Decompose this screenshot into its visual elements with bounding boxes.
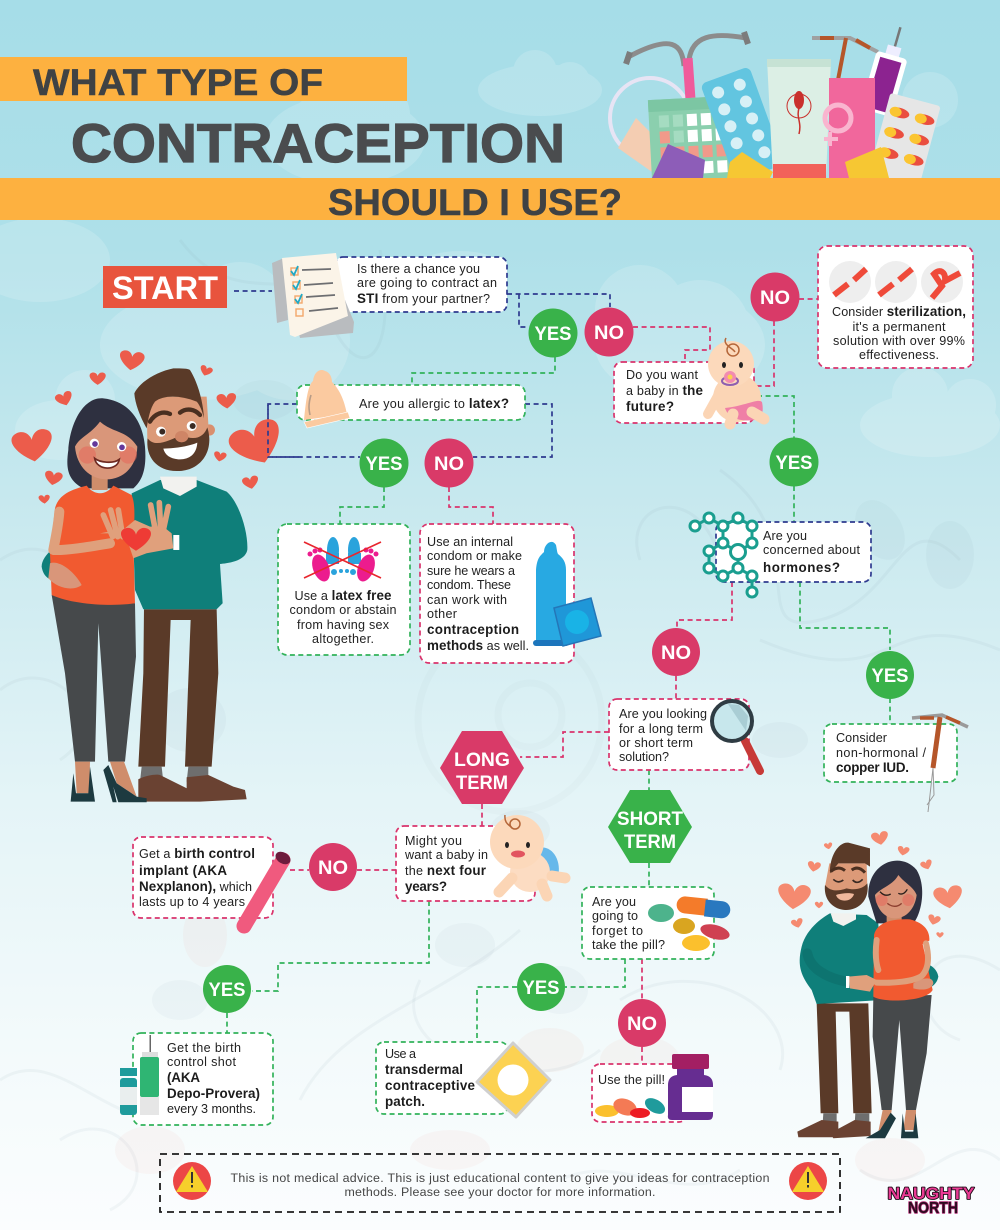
illustration: embracing couple: [777, 830, 964, 1138]
panel: next four years question: [396, 815, 565, 901]
text: implant advice: Get a birth control: [139, 846, 255, 861]
icon: warning left: [173, 1162, 211, 1200]
decision: no: NO: [661, 643, 691, 664]
text: internal condom advice: condom or make: [427, 549, 522, 563]
text: transdermal patch advice: Use a: [385, 1047, 416, 1061]
icon: blue condom and wrapper: [533, 542, 601, 646]
decision: yes: [866, 651, 914, 699]
man head: [134, 368, 215, 471]
text: disclaimer: methods. Please see your doctor for more information.: [344, 1185, 656, 1199]
text: latex free advice: [290, 588, 396, 646]
decision: no: [652, 628, 700, 676]
woman legs: [873, 995, 932, 1110]
icon: implant tube: [244, 849, 293, 926]
panel: use the pill advice: [592, 1054, 713, 1122]
text: pill forget question: going to: [592, 909, 638, 923]
panel: transdermal patch advice: [376, 1042, 550, 1117]
woman shirt: [50, 486, 135, 605]
man collar: [831, 913, 856, 926]
man behind arm: [42, 537, 70, 580]
man sweater: [132, 480, 247, 609]
title bar: should I use: SHOULD I USE?: [328, 182, 622, 223]
decision: no: NO: [318, 858, 348, 879]
panel: implant advice: [133, 837, 293, 926]
text: implant advice: lasts up to 4 years: [139, 895, 245, 909]
text: disclaimer: [230, 1171, 770, 1199]
icon: copper IUD: [812, 38, 878, 80]
heart hands: [53, 503, 179, 558]
panel: copper IUD advice: [824, 715, 968, 812]
text: latex free advice: altogether.: [312, 632, 374, 646]
text: next four years question: years?: [405, 879, 447, 894]
man legs: [138, 609, 218, 767]
woman head: [875, 875, 917, 925]
icon: checklist scroll: [272, 253, 354, 338]
illustration: happy couple making heart hands: [10, 350, 289, 802]
man legs: [817, 1003, 872, 1113]
arm behind: [917, 963, 938, 990]
decision: yes: [770, 438, 818, 486]
text: hormones question: Are you: [763, 529, 807, 543]
text: next four years question: want a baby in: [404, 848, 488, 862]
text: baby question: Do you want: [626, 368, 698, 382]
icon: hormonal IUD: [626, 32, 748, 98]
woman neck and face: [75, 422, 137, 490]
woman hair: [67, 398, 145, 488]
icon: condom wrappers: [652, 144, 889, 178]
text: implant advice: [139, 846, 255, 909]
decision: yes: YES: [776, 453, 812, 474]
decision: yes: YES: [522, 978, 560, 999]
icon: calendar pill pack: [648, 95, 744, 190]
text: latex question: Are you allergic to latex?: [359, 396, 509, 411]
text: implant advice: Nexplanon), which: [139, 879, 252, 894]
text: hormones question: [763, 529, 860, 575]
text: long or short term question: Are you looking: [619, 707, 707, 721]
text: long or short term question: or short term: [619, 736, 693, 750]
text: pill forget question: Are you: [592, 895, 636, 909]
text: birth control shot advice: (AKA: [167, 1070, 200, 1085]
hexagon: long term: [440, 731, 524, 804]
hexagon: short term: TERM: [624, 832, 676, 853]
icon: sterilization tubes: [829, 261, 963, 303]
text: copper IUD advice: [836, 731, 926, 775]
text: latex free advice: from having sex: [297, 618, 390, 632]
callout: medical disclaimer: [160, 1154, 840, 1212]
decision: no: [618, 999, 666, 1047]
text: internal condom advice: other: [427, 607, 457, 621]
woman hair: [868, 861, 922, 923]
connectors: [227, 291, 890, 1064]
hearts: [777, 830, 964, 938]
start label: START: [112, 270, 218, 306]
text: baby question: [626, 368, 703, 414]
decision: yes: [517, 963, 565, 1011]
text: baby question: future?: [626, 399, 674, 414]
text: transdermal patch advice: [385, 1047, 475, 1109]
text: sterilization advice: solution with over 99%: [833, 334, 965, 348]
decision: yes: YES: [208, 980, 246, 1001]
man shoes: [797, 1120, 871, 1138]
panel: latex question: [297, 370, 525, 428]
text: implant advice: implant (AKA: [139, 863, 227, 878]
hexagon: short term: SHORT: [617, 809, 683, 830]
text: STI question: are going to contract an: [357, 276, 497, 290]
logo: naughty north: NORTH: [908, 1200, 958, 1217]
icon: blue blister pack: [700, 66, 785, 182]
panel: hormones question: [690, 513, 871, 597]
icon: pill bottle and pills: [595, 1054, 713, 1120]
decision: no: [309, 843, 357, 891]
icon: crawling baby: [490, 815, 565, 896]
text: internal condom advice: [427, 535, 529, 653]
icon: magnifying glass: [712, 701, 760, 771]
icon: warning right: [789, 1162, 827, 1200]
icon: contraceptive patch: [477, 1043, 550, 1117]
text: transdermal patch advice: patch.: [385, 1094, 425, 1109]
text: pill forget question: [592, 895, 665, 952]
woman shirt: [873, 919, 933, 1001]
decision: yes: [360, 438, 408, 488]
logo: naughty north: [888, 1184, 975, 1217]
text: birth control shot advice: every 3 months.: [167, 1102, 256, 1116]
panel: birth control shot advice: [120, 1033, 273, 1125]
text: copper IUD advice: copper IUD.: [836, 760, 909, 775]
title bar: should I use: [0, 178, 1000, 223]
decision: yes: YES: [366, 454, 402, 475]
text: birth control shot advice: Depo-Provera): [167, 1086, 260, 1101]
man sweater: [800, 913, 882, 1004]
text: birth control shot advice: Get the birth: [167, 1041, 241, 1055]
icon: condom: [304, 370, 350, 428]
text: internal condom advice: can work with: [427, 593, 507, 607]
text: sterilization advice: Consider sterilization,: [832, 304, 966, 319]
text: internal condom advice: methods as well.: [427, 638, 529, 653]
icon: vaginal ring: [610, 78, 690, 158]
text: copper IUD advice: non-hormonal /: [836, 746, 926, 760]
text: sterilization advice: effectiveness.: [859, 348, 939, 362]
text: transdermal patch advice: transdermal: [385, 1062, 463, 1077]
panel: internal condom advice: [420, 524, 601, 663]
decision: yes: [528, 308, 578, 358]
icon: syringe: [860, 23, 916, 117]
man socks: [823, 1113, 869, 1124]
title bar: what type of: [0, 57, 407, 103]
hearts: [10, 350, 289, 504]
man socks: [140, 767, 208, 782]
panel: STI question: [272, 253, 507, 338]
text: internal condom advice: sure he wears a: [427, 564, 515, 578]
text: STI question: STI from your partner?: [357, 291, 490, 306]
text: next four years question: the next four: [405, 863, 487, 878]
woman heels: [71, 765, 147, 802]
decision: yes: YES: [534, 324, 572, 345]
decision: no: [750, 272, 800, 322]
icon: assorted pills: [648, 896, 731, 951]
decision: no: NO: [434, 454, 464, 475]
illustration: contraceptive products: [610, 23, 941, 203]
panel: long or short term question: [609, 699, 760, 771]
connector over heart: [268, 405, 300, 457]
decision: no: NO: [627, 1014, 657, 1035]
embracing arms: [807, 940, 933, 992]
icon: skin patch: [618, 118, 658, 172]
woman heels: [866, 1113, 918, 1138]
man head: [825, 843, 870, 910]
hexagon: short term: [608, 790, 692, 863]
panel: baby question: [614, 338, 764, 424]
panel: sterilization advice: [818, 246, 973, 368]
decision: no: [584, 308, 634, 356]
icon: copper IUD: [912, 715, 968, 812]
icon: crossed out feet: [304, 537, 381, 584]
text: long or short term question: for a long term: [619, 722, 703, 736]
man shoes: [138, 775, 247, 802]
icon: pink packet: [824, 78, 875, 178]
text: latex free advice: condom or abstain: [290, 603, 396, 617]
panel: latex free advice: [278, 524, 410, 655]
decision: yes: YES: [872, 666, 908, 687]
text: pill forget question: take the pill?: [592, 938, 665, 952]
text: sterilization advice: it's a permanent: [852, 320, 946, 334]
icon: cream tube: [767, 59, 831, 178]
text: internal condom advice: contraception: [427, 622, 519, 637]
decision: no: NO: [760, 288, 790, 309]
man hand on woman waist: [48, 563, 82, 588]
hexagon: long term: LONG: [454, 750, 510, 771]
panel: pill forget question: [582, 887, 731, 959]
decision: no: NO: [594, 323, 624, 344]
man collar: [160, 477, 197, 496]
text: next four years question: Might you: [405, 834, 462, 848]
text: next four years question: [404, 834, 488, 894]
text: hormones question: concerned about: [763, 543, 860, 557]
text: STI question: Is there a chance you: [357, 262, 480, 276]
text: STI question: [357, 262, 497, 306]
title bar: what type of: WHAT TYPE OF: [33, 62, 323, 103]
icon: syringe and vial: [120, 1035, 159, 1115]
icon: white blister pack with capsules: [865, 93, 941, 203]
hexagon: long term: TERM: [456, 773, 508, 794]
title: contraception: CONTRACEPTION: [71, 112, 565, 174]
text: use the pill: Use the pill!: [598, 1073, 665, 1087]
text: internal condom advice: Use an internal: [427, 535, 513, 549]
text: pill forget question: forget to: [592, 924, 643, 938]
icon: baby with pacifier: [708, 338, 764, 424]
decision: no: [424, 438, 474, 488]
text: baby question: a baby in the: [626, 383, 703, 398]
text: hormones question: hormones?: [763, 560, 840, 575]
text: birth control shot advice: [167, 1041, 260, 1116]
text: copper IUD advice: Consider: [836, 731, 887, 745]
icon: hormone molecule: [690, 513, 757, 597]
woman feet: [75, 762, 137, 797]
woman feet: [878, 1110, 916, 1132]
text: birth control shot advice: control shot: [167, 1055, 236, 1069]
text: latex free advice: Use a latex free: [294, 588, 392, 603]
text: transdermal patch advice: contraceptive: [385, 1078, 475, 1093]
woman legs: [52, 595, 136, 762]
decision: yes: [203, 965, 251, 1013]
text: disclaimer: This is not medical advice. This is just educational content to give you ideas for contraception: [230, 1171, 770, 1185]
text: long or short term question: [619, 707, 707, 764]
text: internal condom advice: condom. These: [427, 578, 511, 592]
text: long or short term question: solution?: [619, 750, 669, 764]
logo: naughty north: NAUGHTY: [888, 1184, 975, 1203]
text: sterilization advice: [832, 304, 966, 362]
